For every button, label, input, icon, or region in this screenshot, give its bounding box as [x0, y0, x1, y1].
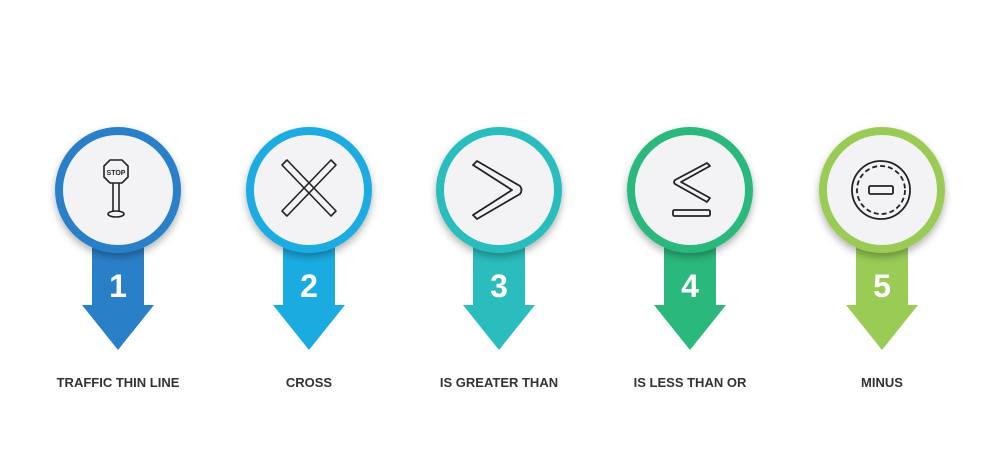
- circle 1: [55, 127, 181, 253]
- number 4: 4: [681, 268, 699, 304]
- icon: less than or equal: [673, 163, 710, 216]
- step 3: is greater than: [436, 127, 562, 390]
- number 3: 3: [490, 268, 508, 304]
- icon: cross: [282, 160, 336, 216]
- step 1: traffic thin line: [55, 127, 181, 390]
- circle 3: [436, 127, 562, 253]
- label 3: IS GREATER THAN: [440, 375, 558, 390]
- icon: stop sign: STOP: [107, 170, 126, 177]
- label 4: IS LESS THAN OR: [634, 375, 747, 390]
- arrow 1: [82, 240, 154, 350]
- step 4: is less than or: [627, 127, 753, 390]
- step 5: minus: [819, 127, 945, 390]
- circle 2: [246, 127, 372, 253]
- icon: stop sign: [104, 160, 128, 217]
- circle 4: [627, 127, 753, 253]
- label 1: TRAFFIC THIN LINE: [57, 375, 180, 390]
- step 2: cross: [246, 127, 372, 390]
- label 2: CROSS: [286, 375, 332, 390]
- icon: minus circle: [852, 161, 910, 219]
- number 5: 5: [873, 268, 891, 304]
- number 1: 1: [109, 268, 127, 304]
- icon: greater than: [473, 161, 522, 219]
- arrow 3: [463, 240, 535, 350]
- arrow 5: [846, 240, 918, 350]
- arrow 4: [654, 240, 726, 350]
- number 2: 2: [300, 268, 318, 304]
- label 5: MINUS: [861, 375, 903, 390]
- circle 5: [819, 127, 945, 253]
- arrow 2: [273, 240, 345, 350]
